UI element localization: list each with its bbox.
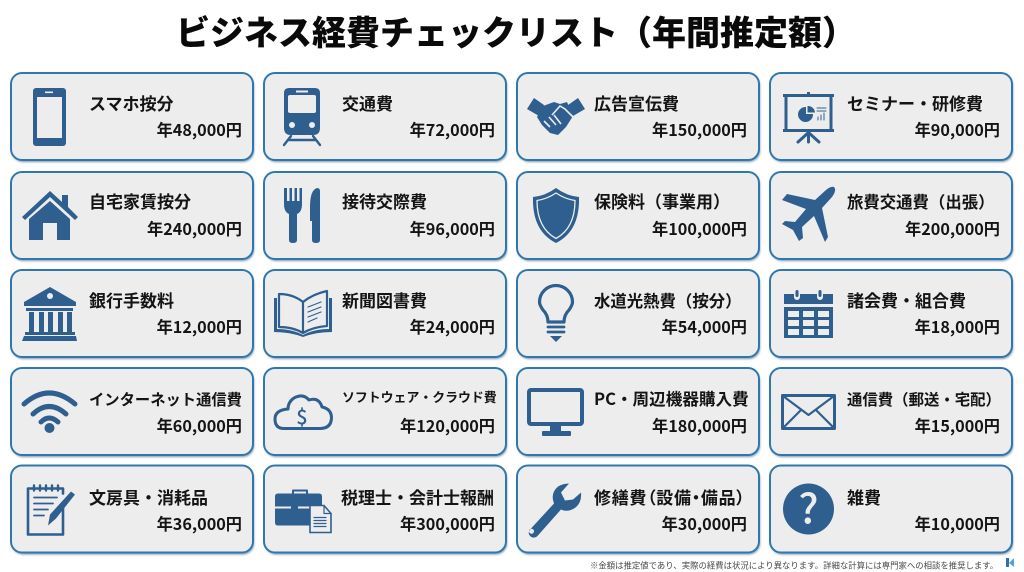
icon: cloud with dollar: $ <box>296 401 308 430</box>
card: PC・周辺機器購入費 <box>517 368 760 457</box>
icon: fork and knife <box>284 188 320 243</box>
icon: calendar <box>784 289 833 338</box>
icon: house <box>22 191 78 240</box>
amount: 年90,000円 <box>915 117 1000 141</box>
name: 文房具・消耗品: 文房具・消耗品 <box>89 484 208 509</box>
card: スマホ按分 <box>11 73 254 162</box>
amount: 年96,000円 <box>410 216 495 240</box>
icon: briefcase and document <box>275 490 331 532</box>
name: PC・周辺機器購入費: PC・周辺機器購入費 <box>594 386 749 410</box>
icon: cloud with dollar <box>275 396 332 430</box>
icon: wifi <box>24 393 75 433</box>
card: 税理士・会計士報酬 <box>264 466 507 554</box>
name: インターネット通信費: インターネット通信費 <box>89 388 242 410</box>
card: 交通費 <box>264 73 507 162</box>
name: 新聞図書費: 新聞図書費 <box>342 287 427 312</box>
amount: 年36,000円 <box>157 511 242 535</box>
icon: envelope <box>782 396 834 428</box>
card: 広告宣伝費 <box>517 73 760 162</box>
amount: 年18,000円 <box>915 314 1000 338</box>
amount: 年30,000円 <box>662 511 747 535</box>
icon: presentation board <box>783 92 834 142</box>
logo mark <box>1006 558 1014 567</box>
name: 銀行手数料: 銀行手数料 <box>89 287 174 312</box>
amount: 年150,000円 <box>652 117 747 141</box>
card: 諸会費・組合費 <box>770 270 1013 359</box>
card: 新聞図書費 <box>264 270 507 359</box>
name: 接待交際費: 接待交際費 <box>342 188 427 213</box>
card: 雑費 <box>770 466 1013 554</box>
card: ソフトウェア・クラウド費 <box>264 368 507 457</box>
name: 広告宣伝費: 広告宣伝費 <box>594 90 679 115</box>
name: 修繕費（設備・備品）: 修繕費（設備・備品） <box>594 484 746 509</box>
card: 文房具・消耗品 <box>11 466 254 554</box>
icon: monitor <box>529 390 582 436</box>
name: セミナー・研修費: セミナー・研修費 <box>847 90 983 115</box>
icon: shield <box>533 188 579 243</box>
card: 通信費（郵送・宅配） <box>770 368 1013 457</box>
amount: 年300,000円 <box>400 511 495 535</box>
name: 雑費: 雑費 <box>847 484 881 509</box>
amount: 年200,000円 <box>905 216 1000 240</box>
card: セミナー・研修費 <box>770 73 1013 162</box>
name: 自宅家賃按分: 自宅家賃按分 <box>89 188 191 213</box>
icon: question mark: ? <box>798 476 819 536</box>
amount: 年10,000円 <box>915 511 1000 535</box>
name: 通信費（郵送・宅配）: 通信費（郵送・宅配） <box>847 388 1001 410</box>
icon: open book <box>274 291 332 337</box>
amount: 年100,000円 <box>652 216 747 240</box>
amount: 年12,000円 <box>157 314 242 338</box>
icon: handshake <box>527 98 585 135</box>
icon: light bulb <box>540 286 572 342</box>
icon: bank <box>22 287 77 341</box>
amount: 年24,000円 <box>410 314 495 338</box>
card: インターネット通信費 <box>11 368 254 457</box>
amount: 年240,000円 <box>147 216 242 240</box>
name: スマホ按分: スマホ按分 <box>89 90 174 115</box>
icon: train <box>284 88 320 145</box>
title: ビジネス経費チェックリスト（年間推定額） <box>176 6 856 55</box>
card: 接待交際費 <box>264 172 507 261</box>
amount: 年15,000円 <box>915 413 1000 437</box>
icon: wrench <box>529 484 581 538</box>
card: 保険料（事業用） <box>517 172 760 261</box>
icon: notepad and pen <box>28 486 75 534</box>
name: 交通費: 交通費 <box>342 90 393 115</box>
icon: airplane <box>782 187 835 242</box>
amount: 年48,000円 <box>157 117 242 141</box>
name: 水道光熱費（按分）: 水道光熱費（按分） <box>594 288 742 312</box>
name: 諸会費・組合費: 諸会費・組合費 <box>847 287 966 312</box>
card: 水道光熱費（按分） <box>517 270 760 359</box>
name: ソフトウェア・クラウド費: ソフトウェア・クラウド費 <box>342 387 497 406</box>
card: 旅費交通費（出張） <box>770 172 1013 261</box>
amount: 年72,000円 <box>410 117 495 141</box>
amount: 年180,000円 <box>652 413 747 437</box>
icon: smartphone <box>33 88 66 146</box>
name: 税理士・会計士報酬: 税理士・会計士報酬 <box>341 484 494 509</box>
card: 修繕費（設備・備品） <box>517 466 760 554</box>
amount: 年120,000円 <box>400 413 495 437</box>
amount: 年54,000円 <box>662 314 747 338</box>
card: 自宅家賃按分 <box>11 172 254 261</box>
footnote: ※金額は推定値であり、実際の経費は状況により異なります。詳細な計算には専門家への相談を推奨します。 <box>590 560 998 572</box>
card: 銀行手数料 <box>11 270 254 359</box>
name: 旅費交通費（出張）: 旅費交通費（出張） <box>847 189 995 213</box>
name: 保険料（事業用）: 保険料（事業用） <box>594 188 730 213</box>
icon: question mark <box>783 476 834 536</box>
amount: 年60,000円 <box>157 413 242 437</box>
